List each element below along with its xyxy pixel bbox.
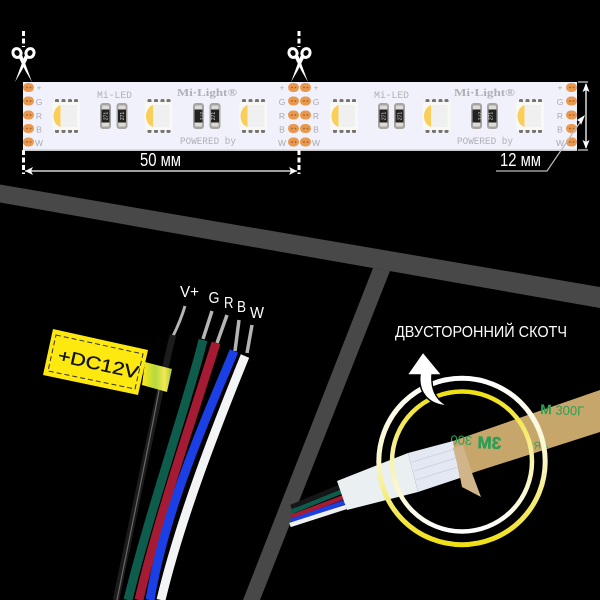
yellow +DC12V label: +DC12V: [56, 345, 141, 383]
tape print: 3M: [477, 433, 502, 453]
resistor markings: 271: [476, 112, 482, 120]
LED strip: [23, 82, 577, 151]
wire labels: B: [237, 299, 246, 316]
resistor markings: 271: [198, 112, 204, 120]
pad labels: G: [313, 97, 319, 107]
wire: white: [161, 356, 245, 600]
resistor markings: 271: [211, 112, 217, 120]
pad labels: R: [557, 111, 563, 121]
resistor markings: 271: [488, 112, 494, 120]
cut line right: [298, 31, 300, 174]
wire labels: W: [250, 305, 265, 322]
wire labels: V+: [180, 284, 199, 301]
pad labels: R: [36, 111, 42, 121]
flex strip: [408, 441, 460, 492]
pad labels: W: [556, 138, 564, 148]
pad labels: G: [279, 97, 285, 107]
wire: black: [116, 335, 173, 600]
vertical divider band: [243, 268, 390, 600]
strip printing: [97, 87, 515, 148]
resistor markings: 271: [104, 112, 110, 120]
pad labels: B: [313, 124, 319, 134]
solder pads: [23, 83, 577, 146]
wire labels: G: [208, 290, 220, 307]
LEDs: [52, 99, 544, 133]
wire: red: [139, 343, 216, 600]
label tab: [142, 362, 172, 392]
icon: scissors left: [11, 47, 36, 82]
dimension: 12 mm: 12 мм: [500, 150, 541, 170]
pad labels: +: [314, 82, 319, 92]
strip printing: Mi-LED: [97, 90, 132, 102]
bare wire ends: [173, 306, 252, 353]
strip printing: Mi·Light®: [177, 87, 237, 99]
yellow +DC12V label: [43, 329, 148, 395]
pad labels: B: [36, 124, 42, 134]
pad labels: +: [280, 82, 285, 92]
curved arrow: [407, 352, 448, 406]
resistor markings: 271: [382, 112, 388, 120]
cut line left: [22, 31, 25, 174]
pad labels: W: [35, 138, 43, 148]
outer ring: [379, 378, 545, 545]
diagonal divider band: [0, 184, 600, 308]
pad labels: [35, 82, 564, 148]
pad labels: R: [279, 111, 285, 121]
heat-shrink connector: [337, 453, 418, 510]
tape caption: ДВУСТОРОННИЙ СКОТЧ: [395, 322, 567, 341]
tape print: [450, 401, 584, 453]
dimension: 50 mm: 50 мм: [140, 150, 181, 170]
tape print: M 300Г: [540, 401, 584, 419]
tape print: ЯA: [533, 440, 548, 452]
pad labels: W: [278, 138, 286, 148]
dimension: 12 mm: [496, 82, 590, 171]
resistor markings: [104, 112, 494, 120]
pad labels: +: [37, 82, 42, 92]
pad labels: G: [557, 97, 563, 107]
strip printing: Mi·Light®: [454, 87, 515, 99]
pad labels: R: [313, 111, 319, 121]
strip printing: POWERED by: [457, 136, 513, 148]
icon: scissors right: [287, 47, 312, 82]
strip printing: Mi-LED: [374, 90, 409, 102]
pad labels: B: [279, 124, 285, 134]
wire: blue: [150, 351, 234, 600]
double-sided tape: [450, 390, 600, 478]
pad labels: +: [558, 82, 563, 92]
pad labels: G: [36, 97, 42, 107]
wire labels: R: [224, 295, 234, 312]
wire: green: [128, 340, 203, 600]
pad labels: W: [312, 138, 320, 148]
tape print: 300: [450, 432, 472, 448]
inner ring: [392, 392, 532, 532]
dimension: 50 mm: [25, 150, 297, 175]
connector wires: [290, 486, 346, 525]
resistor markings: 271: [120, 112, 126, 120]
resistor markings: 271: [398, 112, 404, 120]
peeled tape: [453, 445, 481, 497]
wires bundle: [116, 306, 252, 600]
resistors: [100, 103, 498, 129]
strip printing: POWERED by: [180, 136, 236, 148]
pad labels: B: [557, 124, 563, 134]
wire labels: [180, 284, 265, 322]
